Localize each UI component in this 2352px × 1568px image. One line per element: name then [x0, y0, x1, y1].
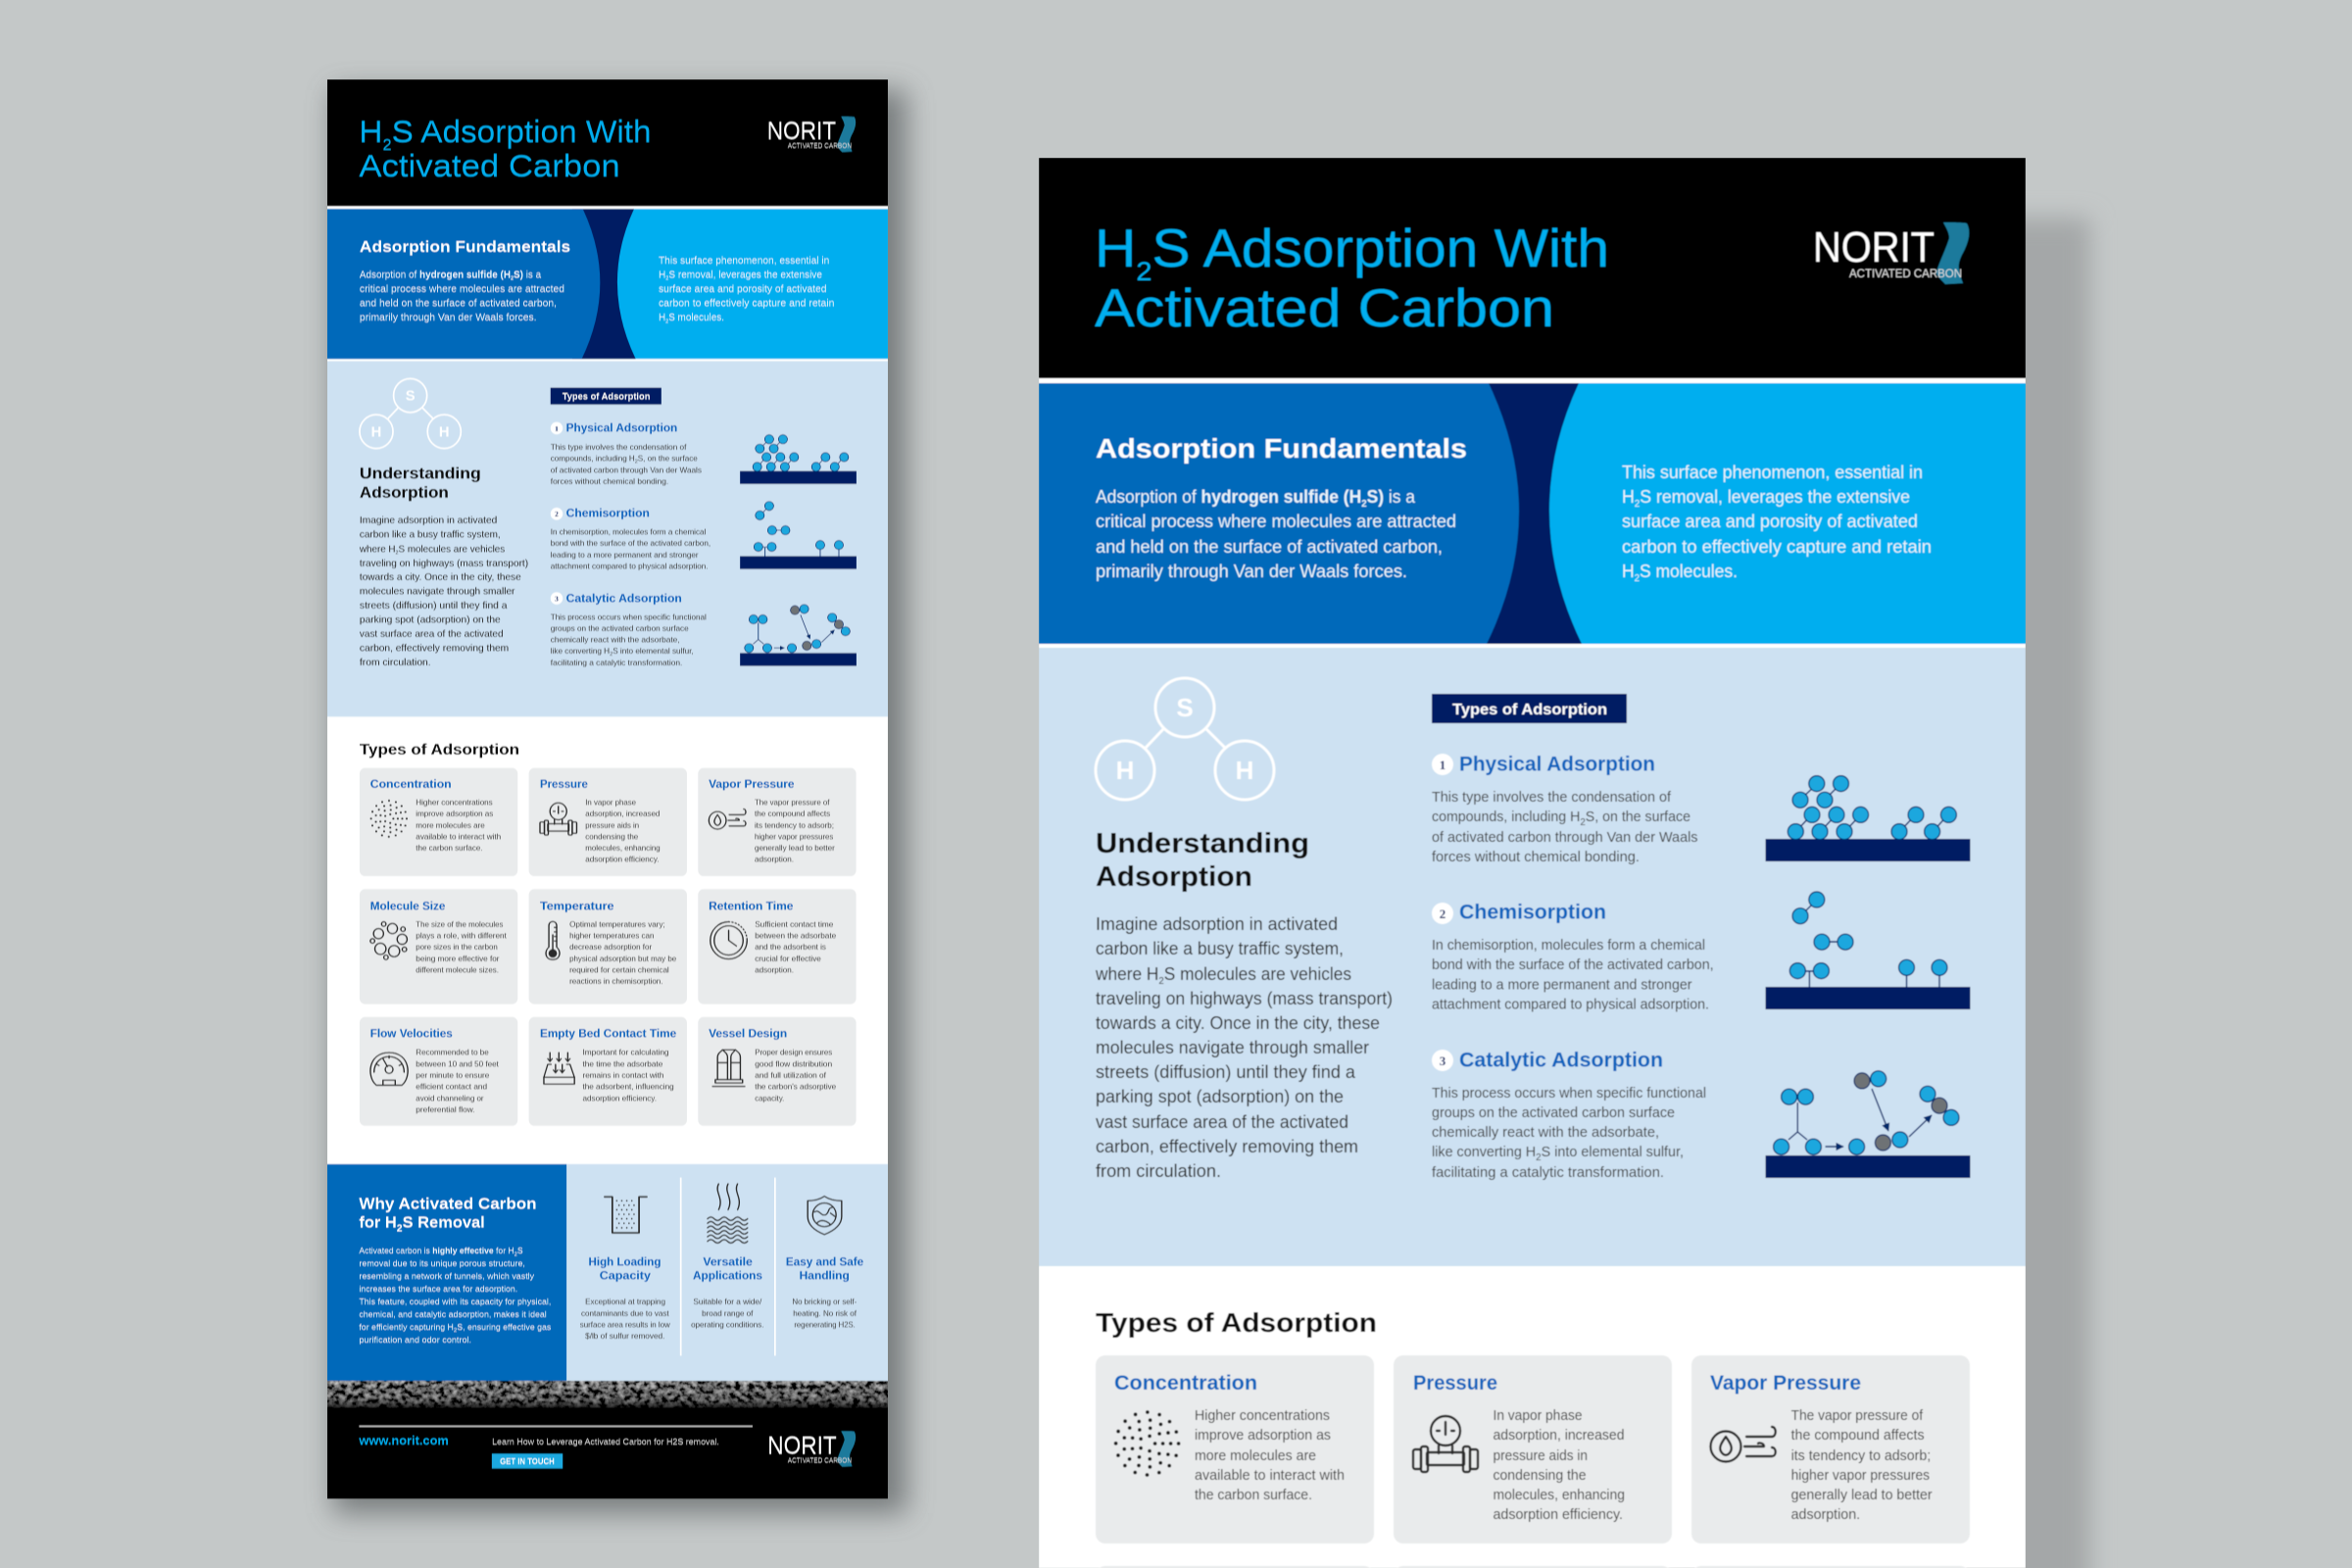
card: concentration: improve adsorption as: [1195, 1428, 1331, 1444]
logo: Norit: NORIT: [1813, 223, 1935, 271]
card: pressure: condensing the: [585, 833, 639, 842]
item: chemisorption: attachment compared to physical adsorption.: [1432, 997, 1709, 1012]
card: empty bed contact time: remains in contact with: [582, 1071, 664, 1080]
card: vapor pressure: generally lead to better: [1791, 1488, 1933, 1503]
benefit: versatile applications: operating conditions.: [691, 1320, 763, 1329]
card: vapor pressure: higher vapor pressures: [1791, 1468, 1930, 1484]
panel: understanding adsorption: from circulation.: [360, 658, 431, 668]
item: catalytic adsorption: chemically react with the adsorbate,: [1432, 1125, 1659, 1141]
poster: enlarged detail: [1039, 158, 2026, 1568]
panel: adsorption fundamentals: surface area and porosity of activated: [659, 284, 827, 295]
panel: understanding adsorption: towards a city. Once in the city, these: [1096, 1013, 1380, 1033]
item: physical adsorption: Physical Adsorption: [566, 421, 677, 435]
benefit: versatile applications: Applications: [693, 1269, 762, 1283]
title: S Adsorption With: [1152, 218, 1609, 278]
card: flow velocities: [360, 1017, 517, 1126]
panel: adsorption fundamentals: primarily through Van der Waals forces.: [360, 313, 537, 323]
panel: why activated carbon: [327, 1164, 566, 1381]
title: [359, 115, 652, 183]
card: vapor pressure: generally lead to better: [755, 844, 835, 853]
tag: types of adsorption: Types of Adsorption: [1452, 702, 1607, 718]
item: physical adsorption: 2: [1580, 817, 1586, 828]
cards: second row tops: [1096, 1566, 1970, 1568]
card: concentration: the carbon surface.: [1195, 1488, 1312, 1503]
card: pressure: pressure aids in: [1494, 1448, 1588, 1464]
panel: understanding adsorption: 2: [396, 551, 399, 557]
card: vapor pressure: adsorption.: [1791, 1507, 1860, 1523]
header band: [327, 79, 888, 1498]
item: catalytic adsorption: like converting H: [1432, 1145, 1537, 1160]
item: catalytic adsorption: facilitating a catalytic transformation.: [1432, 1165, 1664, 1181]
card: retention time: [698, 889, 857, 1004]
panel: understanding adsorption: [1039, 648, 2026, 1266]
benefit: easy and safe handling: Easy and Safe: [786, 1255, 863, 1269]
benefit: high loading capacity: Capacity: [600, 1269, 651, 1283]
card: vessel design: the carbon's adsorptive: [755, 1083, 837, 1092]
panel: why activated carbon: purification and odor control.: [359, 1336, 471, 1345]
card: flow velocities: efficient contact and: [416, 1083, 487, 1092]
card: molecule size: being more effective for: [416, 955, 500, 963]
card: concentration: [1096, 1355, 1374, 1544]
card: temperature: physical adsorption but may be: [569, 955, 677, 963]
panel: adsorption fundamentals: 2: [1635, 573, 1640, 584]
item: physical adsorption: This type involves the condensation of: [1432, 790, 1672, 806]
card: flow velocities: Recommended to be: [416, 1049, 489, 1057]
panel: adsorption fundamentals: is a: [1389, 487, 1416, 507]
item: physical adsorption: This type involves the condensation of: [551, 443, 687, 452]
panel: adsorption fundamentals: Adsorption Fundamentals: [360, 239, 570, 256]
panel: adsorption fundamentals: S removal, leverages the extensive: [668, 270, 822, 280]
card: empty bed contact time: Important for calculating: [582, 1049, 669, 1057]
card: pressure: [529, 768, 687, 876]
benefit: easy and safe handling: heating. No risk of: [793, 1309, 858, 1318]
card: pressure: [1394, 1355, 1672, 1544]
panel: understanding adsorption: where H: [1096, 964, 1161, 984]
card: vessel design: and full utilization of: [755, 1071, 827, 1080]
panel: understanding adsorption: where H: [360, 544, 397, 555]
panel: adsorption fundamentals: H: [659, 270, 665, 280]
card: pressure: molecules, enhancing: [1494, 1488, 1625, 1503]
panel: adsorption fundamentals: and held on the surface of activated carbon,: [1096, 537, 1443, 557]
logo: Norit footer: ACTIVATED CARBON: [788, 1458, 852, 1465]
panel: understanding adsorption: traveling on highways (mass transport): [360, 559, 528, 569]
card: molecule size: Molecule Size: [370, 899, 446, 913]
panel: adsorption fundamentals: critical process where molecules are attracted: [1096, 512, 1456, 531]
tag: types of adsorption: [1432, 694, 1627, 723]
panel: why activated carbon: removal due to its unique porous structure,: [359, 1259, 525, 1268]
card: vessel design: good flow distribution: [755, 1059, 833, 1068]
panel: why activated carbon: increases the surface area for adsorption.: [359, 1285, 517, 1294]
header band: [1039, 158, 2026, 1568]
panel: adsorption fundamentals: S molecules.: [1640, 562, 1738, 581]
poster: overview (full infographic): [327, 79, 888, 1498]
icon: H2S molecule: H: [1236, 756, 1253, 785]
benefit: high loading capacity: contaminants due to vast: [581, 1309, 669, 1318]
card: temperature: higher temperatures can: [569, 931, 655, 940]
benefit: easy and safe handling: No bricking or self-: [792, 1298, 858, 1306]
panel: adsorption fundamentals: surface area and porosity of activated: [1622, 512, 1918, 531]
panel: why activated carbon: resembling a network of tunnels, which vastly: [359, 1272, 535, 1281]
panel: understanding adsorption: carbon, effectively removing them: [360, 644, 509, 655]
title: 2: [382, 137, 392, 154]
item: physical adsorption: of activated carbon through Van der Waals: [551, 466, 702, 474]
icon: H2S molecule: [1096, 678, 1274, 800]
card: concentration: available to interact with: [416, 833, 502, 842]
panel: adsorption fundamentals: Adsorption of hydrogen sulfide (H: [1096, 487, 1367, 507]
logo: Norit: NORIT: [767, 118, 836, 145]
item: chemisorption: In chemisorption, molecules form a chemical: [551, 528, 706, 537]
benefit: high loading capacity: surface area results in low: [580, 1320, 670, 1329]
panel: understanding adsorption: Understanding: [360, 465, 481, 483]
tag: types of adsorption: [551, 388, 662, 405]
item: catalytic adsorption: [551, 591, 857, 667]
logo: Norit footer: NORIT: [767, 1432, 837, 1459]
panel: adsorption fundamentals: critical process where molecules are attracted: [360, 284, 564, 295]
item: physical adsorption: forces without chemical bonding.: [1432, 850, 1640, 865]
item: physical adsorption: of activated carbon through Van der Waals: [1432, 830, 1697, 846]
panel: adsorption fundamentals: This surface phenomenon, essential in: [1622, 463, 1923, 482]
card: concentration: Higher concentrations: [416, 799, 493, 808]
panel: understanding adsorption: 2: [1158, 976, 1164, 987]
item: physical adsorption: [551, 421, 857, 486]
panel: adsorption fundamentals: [1039, 383, 2026, 644]
panel: understanding adsorption: carbon, effectively removing them: [1096, 1137, 1358, 1156]
heading: types of adsorption: Types of Adsorption: [360, 742, 519, 759]
logo: Norit: [1813, 222, 1969, 284]
panel: adsorption fundamentals: carbon to effectively capture and retain: [659, 299, 835, 310]
card: vapor pressure: Vapor Pressure: [1710, 1372, 1861, 1395]
item: chemisorption: In chemisorption, molecules form a chemical: [1432, 938, 1705, 954]
panel: understanding adsorption: molecules navigate through smaller: [1096, 1038, 1369, 1057]
card: retention time: crucial for effective: [755, 955, 821, 963]
panel: understanding adsorption: vast surface area of the activated: [1096, 1112, 1348, 1132]
card: concentration: available to interact with: [1195, 1468, 1345, 1484]
benefit: versatile applications: Suitable for a wide/: [693, 1298, 762, 1306]
item: catalytic adsorption: Catalytic Adsorption: [1459, 1049, 1663, 1072]
panel: understanding adsorption: traveling on highways (mass transport): [1096, 989, 1393, 1008]
item: catalytic adsorption: groups on the activated carbon surface: [1432, 1105, 1675, 1121]
title: Activated Carbon: [359, 149, 620, 183]
panel: why activated carbon: S, ensuring effective gas: [457, 1323, 551, 1332]
footer: www.norit.com: [358, 1434, 449, 1447]
card: vapor pressure: its tendency to adsorb;: [1791, 1448, 1931, 1464]
card: flow velocities: preferential flow.: [416, 1105, 475, 1114]
panel: understanding adsorption: molecules navigate through smaller: [360, 587, 515, 598]
card: concentration: the carbon surface.: [416, 844, 482, 853]
heading: types of adsorption: Types of Adsorption: [1096, 1307, 1377, 1338]
card: temperature: Temperature: [540, 899, 614, 913]
title: S Adsorption With: [392, 115, 652, 149]
card: pressure: adsorption, increased: [1494, 1428, 1625, 1444]
item: catalytic adsorption: 2: [610, 652, 612, 658]
benefit: versatile applications: [691, 1184, 763, 1329]
panel: understanding adsorption: S molecules are vehicles: [399, 544, 505, 555]
panel: adsorption fundamentals: S): [514, 270, 523, 280]
icon: H2S molecule: [360, 378, 461, 449]
panel: understanding adsorption: vast surface area of the activated: [360, 629, 504, 640]
panel: why activated carbon: chemical, and catalytic adsorption, makes it ideal: [359, 1310, 547, 1319]
panel: understanding adsorption: from circulation.: [1096, 1161, 1221, 1181]
icon: H2S molecule: H: [439, 424, 450, 441]
card: retention time: and the adsorbent is: [755, 943, 826, 952]
item: catalytic adsorption: chemically react with the adsorbate,: [551, 635, 680, 644]
card: pressure: Pressure: [540, 777, 588, 791]
benefit: high loading capacity: [580, 1197, 670, 1341]
panel: adsorption fundamentals: 2: [665, 318, 668, 324]
item: physical adsorption: 1: [1440, 758, 1446, 772]
panel: adsorption fundamentals: This surface phenomenon, essential in: [659, 256, 830, 267]
panel: benefits: [566, 1164, 888, 1381]
card: empty bed contact time: adsorption efficiency.: [582, 1094, 657, 1102]
card: temperature: Optimal temperatures vary;: [569, 920, 665, 929]
icon: H2S molecule: S: [406, 389, 416, 405]
title: H: [1095, 218, 1134, 278]
item: catalytic adsorption: facilitating a catalytic transformation.: [551, 659, 682, 667]
benefit: versatile applications: Versatile: [703, 1255, 753, 1269]
card: molecule size: pore sizes in the carbon: [416, 943, 498, 952]
logo: Norit: ACTIVATED CARBON: [1849, 267, 1962, 280]
panel: why activated carbon: S: [517, 1247, 523, 1255]
title: [1095, 218, 1609, 338]
logo: Norit: [767, 117, 856, 152]
footer: Learn How to Leverage Activated Carbon for H2S removal.: [492, 1437, 719, 1446]
card: concentration: Concentration: [1114, 1372, 1257, 1395]
card: flow velocities: per minute to ensure: [416, 1071, 490, 1080]
panel: understanding adsorption: Adsorption: [1096, 861, 1252, 893]
card: pressure: condensing the: [1494, 1468, 1586, 1484]
panel: adsorption fundamentals: primarily through Van der Waals forces.: [1096, 562, 1407, 581]
panel: why activated carbon: 2: [514, 1251, 517, 1257]
card: molecule size: different molecule sizes.: [416, 965, 499, 974]
item: physical adsorption: compounds, including H: [551, 454, 636, 463]
panel: understanding adsorption: streets (diffusion) until they find a: [360, 601, 508, 612]
card: vapor pressure: the compound affects: [755, 809, 830, 818]
item: physical adsorption: S, on the surface: [638, 454, 698, 463]
button: get in touch: [492, 1453, 563, 1468]
panel: adsorption fundamentals: Adsorption Fundamentals: [1096, 433, 1467, 464]
benefit: high loading capacity: $/lb of sulfur removed.: [585, 1332, 664, 1341]
title: Activated Carbon: [1095, 277, 1554, 338]
card: vapor pressure: [1691, 1355, 1970, 1544]
card: flow velocities: between 10 and 50 feet: [416, 1059, 500, 1068]
panel: understanding adsorption: S molecules are vehicles: [1164, 964, 1351, 984]
panel: why activated carbon: S Removal: [403, 1215, 485, 1232]
panel: understanding adsorption: carbon like a busy traffic system,: [360, 529, 501, 540]
card: temperature: required for certain chemical: [569, 965, 669, 974]
panel: adsorption fundamentals: 2: [665, 276, 668, 282]
panel: adsorption fundamentals: 2: [1635, 499, 1641, 510]
card: concentration: [360, 768, 517, 876]
icon: H2S molecule: H: [371, 424, 381, 441]
item: catalytic adsorption: 2: [1536, 1152, 1542, 1163]
item: catalytic adsorption: groups on the activated carbon surface: [551, 624, 689, 633]
card: empty bed contact time: the time the adsorbate: [582, 1059, 663, 1068]
panel: adsorption fundamentals: H: [1622, 562, 1635, 581]
card: flow velocities: avoid channeling or: [416, 1094, 484, 1102]
item: physical adsorption: Physical Adsorption: [1459, 753, 1655, 776]
title: H: [359, 115, 381, 149]
benefit: easy and safe handling: Handling: [800, 1269, 850, 1283]
panel: adsorption fundamentals: 2: [1361, 499, 1367, 510]
panel: understanding adsorption: Adsorption: [360, 483, 449, 502]
card: pressure: adsorption, increased: [585, 809, 661, 818]
item: chemisorption: [551, 502, 857, 570]
card: concentration: improve adsorption as: [416, 809, 493, 818]
panel: understanding adsorption: parking spot (adsorption) on the: [1096, 1087, 1344, 1106]
card: pressure: In vapor phase: [1494, 1408, 1582, 1424]
panel: understanding adsorption: carbon like a busy traffic system,: [1096, 939, 1344, 958]
item: physical adsorption: [1432, 753, 1970, 865]
panel: why activated carbon: for H: [359, 1215, 395, 1232]
panel: why activated carbon: 2: [397, 1224, 403, 1235]
card: temperature: decrease adsorption for: [569, 943, 652, 952]
card: temperature: reactions in chemisorption.: [569, 977, 663, 986]
item: chemisorption: Chemisorption: [566, 506, 650, 520]
panel: adsorption fundamentals: H: [659, 313, 665, 323]
item: catalytic adsorption: [1432, 1049, 1970, 1181]
item: chemisorption: bond with the surface of the activated carbon,: [551, 539, 710, 548]
item: physical adsorption: 2: [635, 460, 638, 466]
card: retention time: Retention Time: [709, 899, 794, 913]
button: get in touch: GET IN TOUCH: [500, 1457, 555, 1466]
benefit: easy and safe handling: [786, 1197, 863, 1329]
tag: types of adsorption: Types of Adsorption: [563, 392, 651, 402]
item: chemisorption: leading to a more permanent and stronger: [551, 551, 699, 560]
card: vapor pressure: The vapor pressure of: [1791, 1408, 1924, 1424]
panel: adsorption fundamentals: 2: [511, 276, 514, 282]
card: molecule size: plays a role, with different: [416, 931, 508, 940]
item: catalytic adsorption: Catalytic Adsorption: [566, 591, 682, 605]
benefit: easy and safe handling: regenerating H2S.: [794, 1320, 856, 1329]
card: molecule size: [360, 889, 517, 1004]
item: chemisorption: 2: [555, 510, 559, 518]
panel: adsorption fundamentals: S molecules.: [668, 313, 724, 323]
card: concentration: Higher concentrations: [1195, 1408, 1330, 1424]
card: concentration: more molecules are: [416, 821, 485, 830]
panel: understanding adsorption: towards a city. Once in the city, these: [360, 572, 521, 583]
card: empty bed contact time: Empty Bed Contact Time: [540, 1026, 676, 1041]
logo: Norit: ACTIVATED CARBON: [788, 143, 852, 150]
card: pressure: adsorption efficiency.: [1494, 1507, 1623, 1523]
panel: adsorption fundamentals: S): [1367, 487, 1384, 507]
item: physical adsorption: 1: [555, 424, 559, 433]
panel: adsorption fundamentals: H: [1622, 487, 1635, 507]
panel: adsorption fundamentals: [327, 209, 888, 359]
panel: why activated carbon: for efficiently capturing H: [359, 1323, 448, 1332]
panel: adsorption fundamentals: is a: [526, 270, 542, 280]
card: vessel design: Proper design ensures: [755, 1049, 832, 1057]
item: chemisorption: leading to a more permanent and stronger: [1432, 977, 1692, 993]
panel: why activated carbon: Why Activated Carbon: [359, 1196, 537, 1212]
image strip: activated carbon texture: [327, 1381, 888, 1408]
card: vapor pressure: adsorption.: [755, 856, 794, 864]
card: vessel design: capacity.: [755, 1094, 784, 1102]
card: retention time: between the adsorbate: [755, 931, 837, 940]
panel: adsorption fundamentals: Adsorption of hydrogen sulfide (H: [360, 270, 514, 280]
item: catalytic adsorption: like converting H: [551, 647, 611, 656]
item: catalytic adsorption: This process occurs when specific functional: [1432, 1086, 1706, 1102]
panel: adsorption fundamentals: S removal, leverages the extensive: [1640, 487, 1910, 507]
icon: H2S molecule: H: [1116, 756, 1134, 785]
panel: understanding adsorption: Imagine adsorption in activated: [1096, 914, 1338, 934]
card: empty bed contact time: [529, 1017, 687, 1126]
card: pressure: In vapor phase: [585, 799, 636, 808]
card: vapor pressure: Vapor Pressure: [709, 777, 795, 791]
card: vapor pressure: higher vapor pressures: [755, 833, 833, 842]
card: retention time: adsorption.: [755, 965, 794, 974]
item: chemisorption: [1432, 892, 1970, 1012]
panel: understanding adsorption: streets (diffusion) until they find a: [1096, 1062, 1356, 1082]
card: empty bed contact time: the adsorbent, influencing: [582, 1083, 674, 1092]
card: vapor pressure: [698, 768, 857, 876]
card: concentration: Concentration: [370, 777, 452, 791]
panel: understanding adsorption: Understanding: [1096, 828, 1309, 859]
item: catalytic adsorption: 3: [1440, 1054, 1446, 1068]
item: catalytic adsorption: This process occurs when specific functional: [551, 612, 707, 621]
card: vapor pressure: its tendency to adsorb;: [755, 821, 834, 830]
item: chemisorption: bond with the surface of the activated carbon,: [1432, 957, 1714, 973]
panel: adsorption fundamentals: and held on the surface of activated carbon,: [360, 299, 557, 310]
item: catalytic adsorption: S into elemental sulfur,: [1542, 1145, 1684, 1160]
card: pressure: Pressure: [1413, 1372, 1497, 1395]
card: concentration: more molecules are: [1195, 1448, 1316, 1464]
card: pressure: adsorption efficiency.: [585, 856, 660, 864]
card: vessel design: [698, 1017, 857, 1126]
panel: adsorption fundamentals: carbon to effectively capture and retain: [1622, 537, 1932, 557]
card: molecule size: The size of the molecules: [416, 920, 503, 929]
card: retention time: Sufficient contact time: [755, 920, 834, 929]
card: vapor pressure: the compound affects: [1791, 1428, 1925, 1444]
card: vessel design: Vessel Design: [709, 1026, 787, 1041]
panel: why activated carbon: 2: [454, 1328, 457, 1334]
item: chemisorption: Chemisorption: [1459, 902, 1606, 923]
item: catalytic adsorption: 3: [555, 594, 559, 603]
icon: H2S molecule: S: [1176, 693, 1194, 722]
item: physical adsorption: S, on the surface: [1586, 809, 1690, 825]
card: pressure: pressure aids in: [585, 821, 639, 830]
card: flow velocities: Flow Velocities: [370, 1026, 453, 1041]
benefit: high loading capacity: High Loading: [589, 1255, 661, 1269]
panel: why activated carbon: Activated carbon is highly effective for H: [359, 1247, 514, 1255]
item: physical adsorption: forces without chemical bonding.: [551, 477, 668, 486]
card: vapor pressure: The vapor pressure of: [755, 799, 830, 808]
panel: understanding adsorption: Imagine adsorption in activated: [360, 515, 498, 526]
panel: understanding adsorption: parking spot (adsorption) on the: [360, 614, 501, 625]
item: chemisorption: 2: [1440, 906, 1446, 921]
footer: [327, 1407, 888, 1498]
benefit: high loading capacity: Exceptional at trapping: [585, 1298, 665, 1306]
panel: why activated carbon: This feature, coupled with its capacity for physical,: [359, 1298, 551, 1306]
benefit: versatile applications: broad range of: [702, 1309, 754, 1318]
logo: Norit footer: [767, 1431, 856, 1467]
card: temperature: [529, 889, 687, 1004]
item: catalytic adsorption: S into elemental sulfur,: [612, 647, 694, 656]
title: 2: [1136, 257, 1152, 286]
panel: understanding adsorption: [327, 361, 888, 716]
item: physical adsorption: compounds, including H: [1432, 809, 1584, 825]
card: pressure: molecules, enhancing: [585, 844, 661, 853]
item: chemisorption: attachment compared to physical adsorption.: [551, 562, 709, 570]
